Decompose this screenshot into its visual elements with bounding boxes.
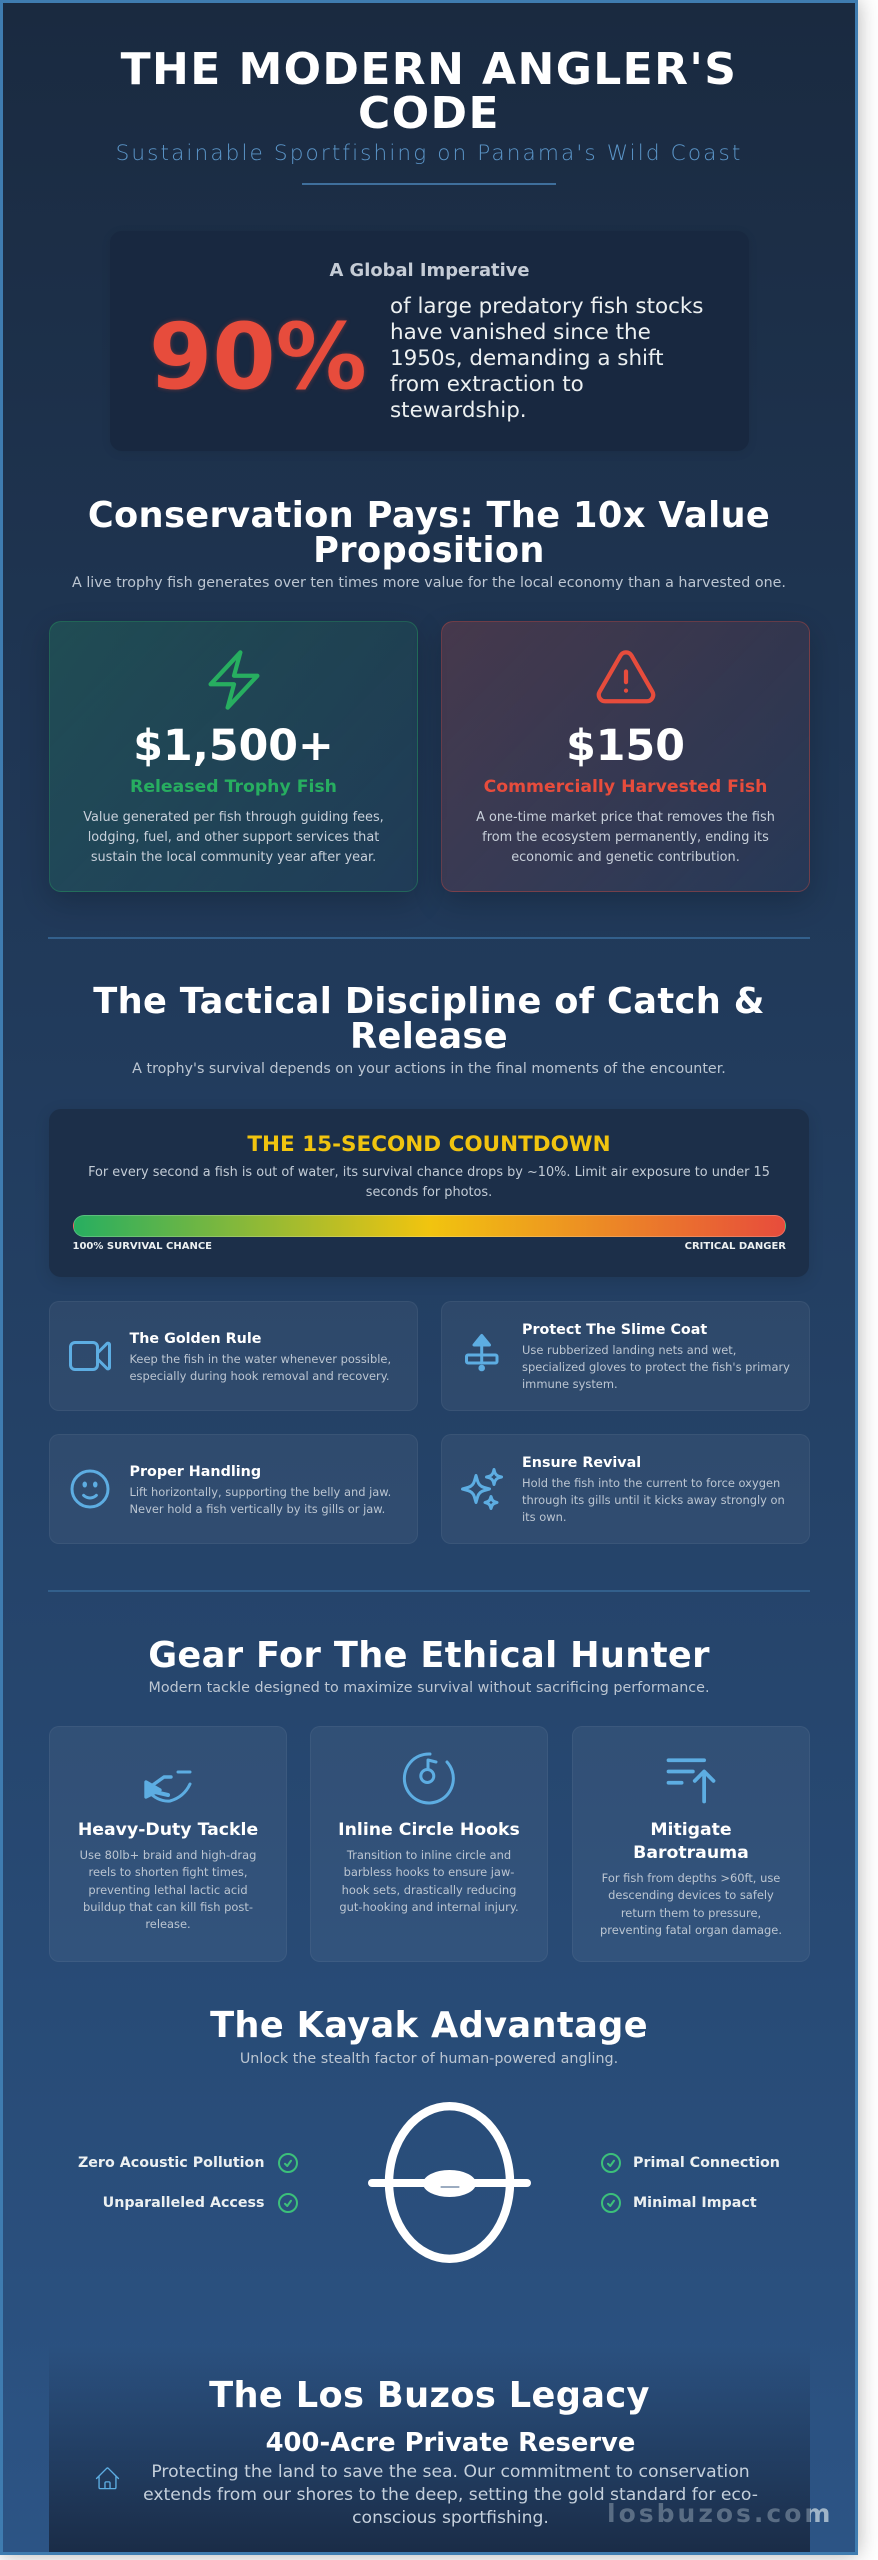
gear text: return them to pressure,: [621, 1906, 761, 1920]
gear text: preventing lethal lactic acid: [88, 1882, 248, 1896]
icon: check: [278, 2193, 298, 2213]
gear text: buildup that can kill fish post-: [83, 1900, 253, 1914]
rule text: through its gills until it kicks away strongly on: [522, 1493, 785, 1507]
gear text: Use 80lb+ braid and high-drag: [80, 1848, 256, 1862]
gear text: [80, 1848, 256, 1931]
legacy heading: The Los Buzos Legacy: [209, 2375, 650, 2416]
description: A one-time market price that removes the fish: [476, 810, 775, 824]
kayak benefit: unparalleled access: Unparalleled Access: [103, 2195, 264, 2211]
countdown text: seconds for photos.: [366, 1185, 492, 1200]
icon: warning: [596, 650, 656, 704]
title: THE MODERN ANGLER'S: [121, 44, 737, 95]
rule text: Lift horizontally, supporting the belly and jaw.: [130, 1484, 391, 1498]
stat description: have vanished since the: [390, 320, 651, 345]
rule text: Use rubberized landing nets and wet,: [522, 1342, 736, 1356]
kayak benefit: primal connection: Primal Connection: [633, 2155, 780, 2171]
label: Commercially Harvested Fish: [484, 776, 767, 796]
gear text: Transition to inline circle and: [347, 1848, 511, 1862]
reserve text: Protecting the land to save the sea. Our commitment to conservation: [151, 2462, 750, 2482]
panel: released trophy fish: [49, 621, 418, 892]
gear text: reels to shorten fight times,: [88, 1865, 248, 1879]
panel: heavy-duty tackle: [49, 1726, 287, 1962]
icon: home: [96, 2467, 120, 2490]
panel heading: A Global Imperative: [329, 260, 530, 281]
rule title: Protect The Slime Coat: [522, 1322, 707, 1338]
rule text: its own.: [522, 1510, 566, 1524]
heading: kayak: The Kayak Advantage: [210, 2005, 648, 2046]
countdown text: For every second a fish is out of water, its survival chance drops by ~10%. Limit air exposure to under 15: [88, 1164, 770, 1180]
gear text: [600, 1871, 782, 1937]
rule title: The Golden Rule: [130, 1330, 261, 1346]
panel: proper handling: [49, 1434, 418, 1544]
heading: conservation pays: Proposition: [313, 530, 545, 571]
title: CODE: [358, 88, 500, 138]
gear text: [339, 1848, 519, 1914]
heading: tactical discipline: The Tactical Discipline of Catch &: [93, 981, 765, 1022]
icon: bars arrow up: [666, 1758, 716, 1804]
rule title: Ensure Revival: [522, 1454, 641, 1470]
heading: conservation pays: Conservation Pays: The 10x Value: [88, 495, 770, 536]
gear title: [633, 1820, 749, 1863]
kayak benefit: minimal impact: Minimal Impact: [633, 2195, 757, 2211]
rule text: Hold the fish into the current to force oxygen: [522, 1476, 780, 1490]
panel: the golden rule: [49, 1301, 418, 1411]
rule text: [130, 1484, 391, 1516]
stat description: [390, 294, 703, 423]
kayak benefit: zero acoustic pollution: Zero Acoustic Pollution: [78, 2155, 264, 2171]
bar label: right: CRITICAL DANGER: [685, 1241, 786, 1252]
panel: 15-second countdown: [49, 1109, 809, 1277]
rule text: specialized gloves to protect the fish's primary: [522, 1360, 790, 1374]
rule title: Proper Handling: [130, 1464, 261, 1480]
rule text: immune system.: [522, 1377, 618, 1391]
icon: bolt: [208, 650, 260, 710]
icon: check: [278, 2153, 298, 2173]
icon: tackle: [144, 1770, 192, 1803]
subtitle: Sustainable Sportfishing on Panama's Wild Coast: [116, 140, 742, 166]
heading: tactical discipline: [93, 981, 765, 1057]
gear text: preventing fatal organ damage.: [600, 1923, 782, 1937]
title: [120, 44, 737, 138]
icon: net and arrow: [465, 1334, 498, 1372]
reserve text: [143, 2462, 758, 2528]
panel: mitigate barotrauma: [572, 1726, 810, 1962]
icon: circle hook: [402, 1752, 455, 1804]
countdown text: [88, 1164, 770, 1200]
gear text: For fish from depths >60ft, use: [602, 1871, 780, 1885]
big stat 90%: 90%: [149, 305, 367, 410]
gear title: Inline Circle Hooks: [338, 1820, 520, 1840]
reserve text: extends from our shores to the deep, setting the gold standard for eco-: [143, 2485, 758, 2505]
gear title: Barotrauma: [633, 1843, 749, 1863]
description: [476, 810, 775, 865]
label: Released Trophy Fish: [130, 776, 337, 796]
gear text: descending devices to safely: [608, 1888, 774, 1902]
heading: tactical discipline: Release: [350, 1016, 508, 1057]
survival gradient bar: [73, 1215, 786, 1237]
description: lodging, fuel, and other support services that: [88, 830, 379, 845]
panel: inline circle hooks: [310, 1726, 548, 1962]
icon: sparkles: [461, 1468, 503, 1510]
reserve text: conscious sportfishing.: [352, 2508, 549, 2528]
description: from the ecosystem permanently, ending its: [482, 830, 769, 845]
gear text: gut-hooking and internal injury.: [339, 1900, 519, 1914]
stat description: of large predatory fish stocks: [390, 294, 703, 319]
countdown heading: THE 15-SECOND COUNTDOWN: [247, 1132, 611, 1156]
description: economic and genetic contribution.: [511, 850, 740, 865]
gear text: barbless hooks to ensure jaw-: [344, 1865, 514, 1879]
description: sustain the local community year after year.: [91, 850, 376, 865]
gear text: release.: [145, 1917, 191, 1931]
description: Value generated per fish through guiding fees,: [83, 810, 384, 824]
rule text: especially during hook removal and recovery.: [130, 1369, 390, 1383]
panel: commercially harvested fish: [441, 621, 810, 892]
panel: protect the slime coat: [441, 1301, 810, 1411]
gear text: hook sets, drastically reducing: [342, 1882, 516, 1896]
description: [83, 810, 384, 865]
value: $150: [566, 721, 685, 771]
stat description: from extraction to: [390, 372, 584, 397]
icon: smile: [70, 1470, 110, 1508]
bar label: left: 100% SURVIVAL CHANCE: [72, 1241, 212, 1252]
rule text: Keep the fish in the water whenever possible,: [130, 1352, 391, 1366]
gear title: Heavy-Duty Tackle: [78, 1820, 258, 1840]
subheading: gear: Modern tackle designed to maximize survival without sacrificing performance.: [148, 1680, 710, 1696]
rule text: [522, 1476, 785, 1524]
panel: global imperative: [110, 231, 749, 451]
stat description: stewardship.: [390, 398, 527, 423]
rule text: [522, 1342, 790, 1391]
value: $1,500+: [133, 721, 334, 771]
watermark: losbuzos.com: [607, 2498, 833, 2528]
subheading: conservation pays: A live trophy fish generates over ten times more value for the local economy than a harvested one.: [72, 574, 786, 590]
panel: los buzos legacy: [49, 2345, 810, 2552]
icon: check: [601, 2153, 621, 2173]
panel: ensure revival: [441, 1434, 810, 1544]
icon: check: [601, 2193, 621, 2213]
heading: conservation pays: [88, 495, 770, 571]
icon: video camera: [69, 1341, 111, 1371]
rule text: Never hold a fish vertically by its gills or jaw.: [130, 1502, 385, 1516]
kayak diagram: [368, 2102, 531, 2263]
reserve title: 400-Acre Private Reserve: [266, 2428, 635, 2458]
gear title: Mitigate: [650, 1820, 732, 1840]
subheading: tactical discipline: A trophy's survival depends on your actions in the final moments of the encounter.: [132, 1061, 726, 1077]
subheading: kayak: Unlock the stealth factor of human-powered angling.: [240, 2051, 618, 2067]
stat description: 1950s, demanding a shift: [390, 346, 664, 371]
heading: gear: Gear For The Ethical Hunter: [148, 1635, 710, 1676]
rule text: [130, 1352, 391, 1383]
